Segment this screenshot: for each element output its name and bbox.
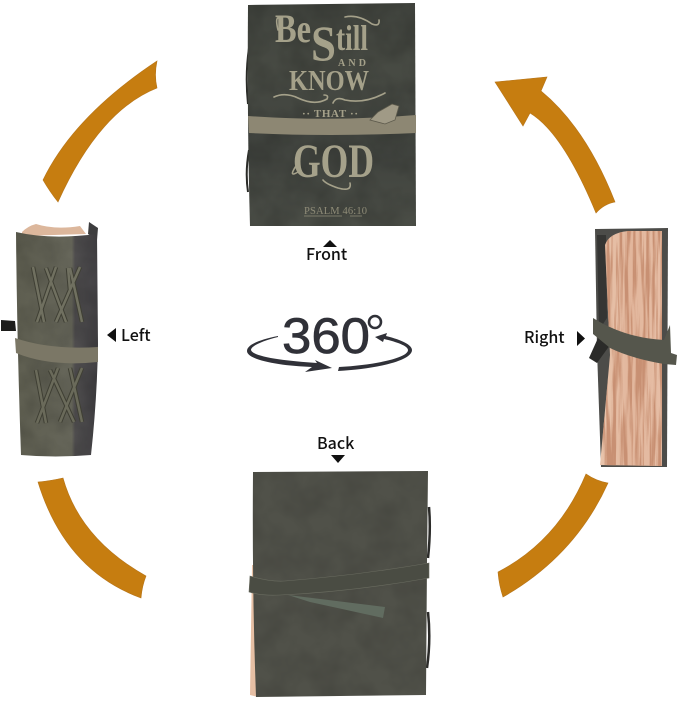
book: back cover xyxy=(249,471,430,697)
pointer xyxy=(331,455,345,463)
swirls xyxy=(274,16,385,189)
embossed title: ·· THAT ·· xyxy=(302,108,358,120)
pointer xyxy=(577,331,585,346)
spine stitches xyxy=(247,48,249,192)
embossed title: PSALM 46:10 xyxy=(304,206,367,217)
strap tail xyxy=(288,595,385,618)
rotation arrow right xyxy=(338,333,412,371)
embossed title: S xyxy=(311,15,336,71)
upper stitching xyxy=(33,267,82,322)
spine stitches xyxy=(427,507,430,668)
icon: 360 degree rotation: 360 xyxy=(282,308,370,364)
page streaks xyxy=(602,231,662,466)
arrow arc: top left xyxy=(43,61,157,202)
strap xyxy=(593,318,677,365)
book: front cover xyxy=(247,3,416,226)
arrow arc: bottom left xyxy=(38,478,146,598)
label: Front: Front xyxy=(306,241,348,265)
book: right side with pages xyxy=(589,228,677,468)
label: Right xyxy=(524,324,585,348)
icon: 360 degree rotation xyxy=(247,308,412,372)
arrow arc: top right with arrowhead xyxy=(495,77,615,213)
pages xyxy=(600,231,662,466)
embossed title: AND xyxy=(338,58,366,69)
spine body xyxy=(16,232,98,456)
label: Back: Back xyxy=(317,430,355,454)
cover leather xyxy=(253,471,428,697)
page edge xyxy=(250,565,259,697)
embossed title: KNOW xyxy=(289,66,369,97)
strap xyxy=(15,338,98,363)
pointer xyxy=(107,328,116,342)
embossed title: Be xyxy=(275,6,311,51)
strap xyxy=(249,563,429,595)
embossed title: GOD xyxy=(293,135,374,188)
lower stitching xyxy=(36,368,82,423)
label: Right: Right xyxy=(524,324,565,348)
cover leather xyxy=(248,3,416,226)
pointer xyxy=(323,240,337,247)
embossed title: till xyxy=(336,18,368,58)
rotation arrow left xyxy=(247,336,332,372)
label: Left xyxy=(107,322,151,346)
pages on top xyxy=(22,224,86,236)
embossed title xyxy=(274,6,385,217)
strap tail xyxy=(589,338,610,363)
strap xyxy=(248,115,416,135)
degree ring xyxy=(369,316,381,328)
cover edges xyxy=(595,228,668,467)
label: Left: Left xyxy=(121,322,151,346)
arrow arc: bottom right xyxy=(498,474,608,597)
book: left spine xyxy=(1,222,98,457)
strap knot xyxy=(370,104,399,124)
strap tag xyxy=(1,320,16,331)
